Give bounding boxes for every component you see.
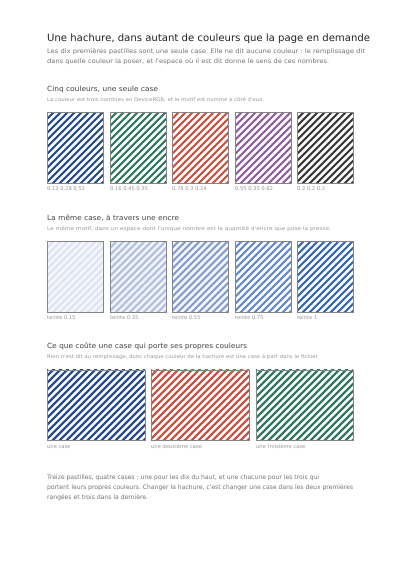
swatch: second cell red [151, 369, 250, 450]
swatch: third cell green: une troisième case [256, 443, 305, 450]
intro text [47, 48, 366, 65]
closing note: rangées et trois dans la dernière. [47, 494, 148, 501]
panel: cinq couleurs [47, 85, 354, 192]
swatch: tint 0.75 [235, 242, 292, 321]
swatch: tint 0.35 [110, 242, 166, 321]
swatch: tint 0.35: teinte 0.35 [110, 315, 138, 321]
closing note [46, 474, 353, 501]
swatch: green hatch [110, 112, 166, 192]
heading: cinq couleurs: Cinq couleurs, une seule case [47, 85, 158, 93]
closing note: portent leurs propres couleurs. Changer la hachure, c'est changer une case dans les deux premières [47, 484, 353, 491]
swatch: third cell green [256, 369, 354, 450]
swatch: tint 0.15 [47, 242, 104, 321]
heading: la même case: La même case, à travers une encre [47, 214, 179, 222]
swatch: purple hatch [235, 112, 292, 192]
subheading: la même case: Le même motif, dans un espace dont l'unique nombre est la quantité d'encre que pose la presse. [47, 226, 331, 232]
swatch: blue hatch: 0.12 0.28 0.52 [47, 186, 85, 192]
swatch: one cell blue: une case [47, 444, 70, 450]
intro text: Les dix premières pastilles sont une seule case. Elle ne dit aucune couleur : le remplissage dit [47, 48, 366, 55]
title: Une hachure, dans autant de couleurs que la page en demande [47, 33, 370, 44]
swatch: tint 0.75: teinte 0.75 [235, 315, 263, 321]
intro text: dans quelle couleur la poser, et l'espace où il est dit donne le sens de ces nombres. [47, 58, 329, 65]
swatch: tint 1 [297, 242, 354, 321]
closing note: Treize pastilles, quatre cases : une pour les dix du haut, et une chacune pour les trois qui [46, 474, 319, 481]
swatch: dark hatch: 0.2 0.2 0.2 [297, 186, 325, 192]
swatch: red hatch [172, 112, 228, 192]
panel: ce que coûte une case [47, 342, 354, 450]
swatch: green hatch: 0.16 0.45 0.35 [110, 186, 148, 192]
swatch: tint 0.55 [172, 242, 228, 321]
subheading: ce que coûte: Rien n'est dit au remplissage, donc chaque couleur de la hachure est une case à part dans le fichier. [47, 354, 319, 360]
swatch: dark hatch [297, 112, 354, 192]
swatch: one cell blue [47, 369, 146, 450]
panel: la même case [47, 214, 354, 321]
swatch: second cell red: une deuxième case [151, 443, 202, 450]
swatch: tint 0.15: teinte 0.15 [47, 315, 75, 321]
swatch: blue hatch [47, 112, 104, 192]
swatch: purple hatch: 0.55 0.35 0.62 [235, 186, 273, 192]
swatch: tint 0.55: teinte 0.55 [172, 315, 200, 321]
subheading: cinq couleurs: La couleur est trois nombres en DeviceRGB, et le motif est nommé à côté d'eux. [47, 97, 264, 103]
swatch: red hatch: 0.78 0.3 0.24 [172, 186, 207, 192]
heading: ce que coûte: Ce que coûte une case qui porte ses propres couleurs [47, 342, 247, 350]
swatch: tint 1: teinte 1 [297, 315, 317, 321]
